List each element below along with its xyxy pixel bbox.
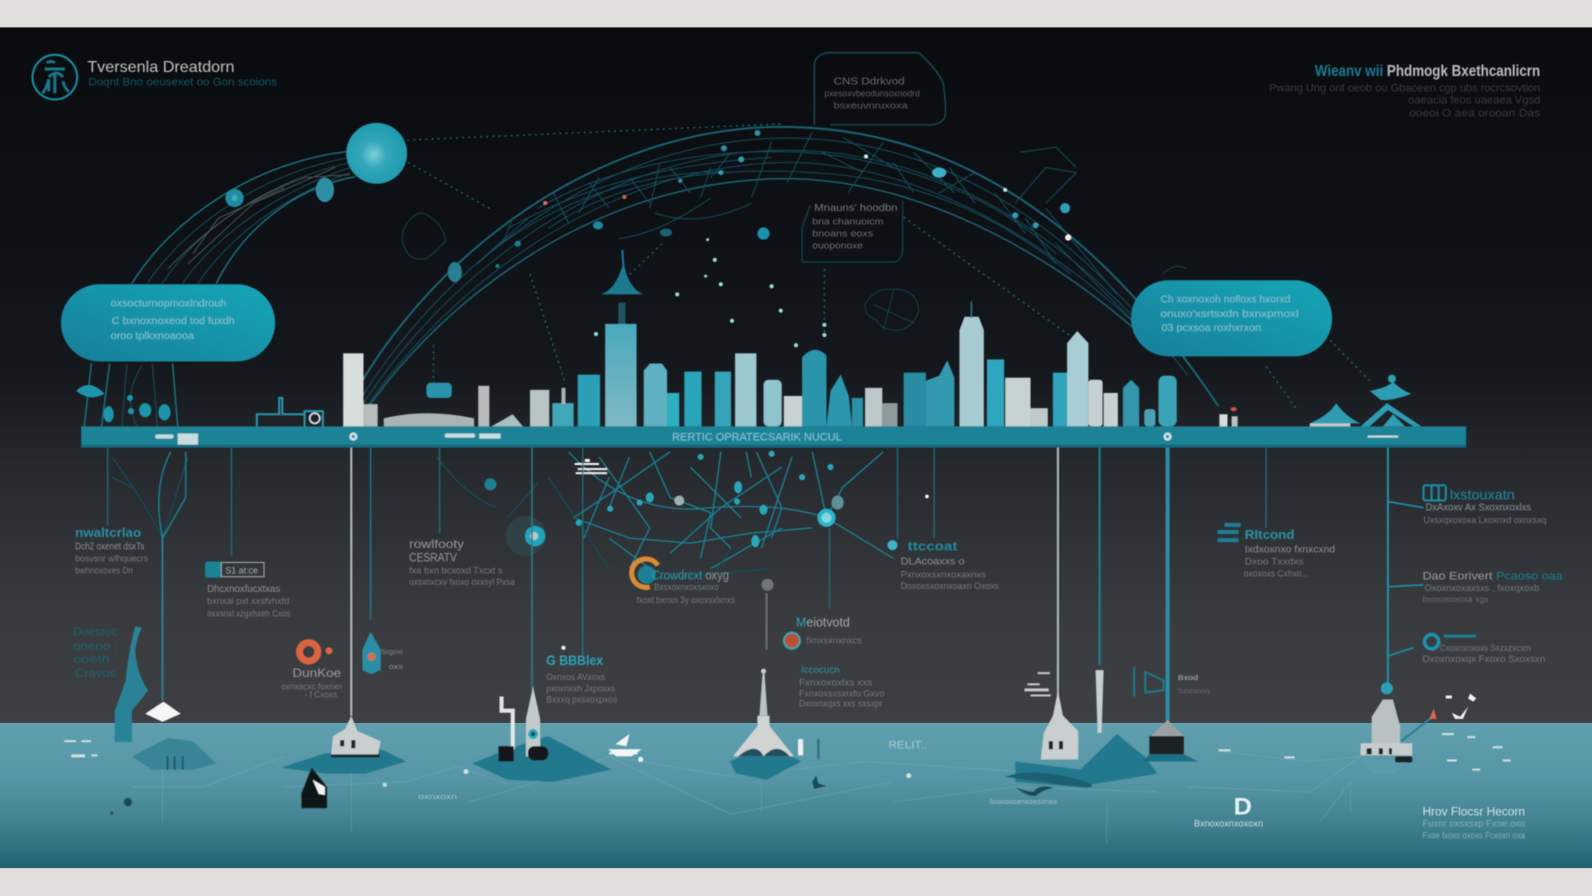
text block: lower middle: Fxnxoxoxlxs xxs (799, 677, 873, 687)
text block: six badge: pxnxnxxh Jxpoxxs (546, 683, 616, 693)
mini icon with two labels: Sxxnoxxs (1178, 687, 1211, 695)
text block: right middle: Dao Eorivert Pcaoso oaa (1422, 571, 1563, 583)
callout: upper outline box: bsxeuvnruxoxa (834, 101, 909, 111)
left reflection (132, 738, 216, 770)
text block: right lower with ring: Cxoxnxnxoxs Sxzxzxcxm (1440, 643, 1531, 653)
text block: left upper: bosvsnr wfhquecrs (75, 553, 149, 563)
pavilions (1310, 375, 1421, 426)
ship left (331, 716, 381, 757)
text block: centre-left title (409, 537, 516, 587)
dark fish marks (110, 776, 1054, 815)
text block: centre-left title: uxsxnxcxv fxoxo oxxsyl Pxsa (409, 577, 516, 587)
title: Tversenla Dreatdorn (87, 59, 235, 76)
icon: white boat (608, 734, 643, 762)
text block: centre-left title: rowlfooty (409, 537, 465, 551)
label: small under-water caption: oxnxoxn (418, 793, 457, 801)
panel: right pill callout: 03 pcxsoa roxhxrxon (1162, 323, 1261, 334)
text block: RItcond: RItcond (1245, 527, 1295, 542)
icon: orange ring label (281, 643, 342, 700)
text block: crowd label with orange ring (632, 559, 735, 605)
outline sketch icons (402, 213, 1187, 331)
icon: orange ring label: DunKoe (292, 666, 341, 680)
callout: lower outline box: bna chanuoicm (812, 216, 883, 226)
text block: RItcond: Ixdxoxnxo fxnxcxnd (1245, 544, 1335, 555)
text block: right middle (1422, 571, 1563, 604)
callout: upper outline box: CNS Ddrkvod (834, 76, 905, 87)
text block: middle label (784, 614, 862, 649)
text block: crowd label with orange ring: Crowdrcxt oxyg (652, 568, 729, 583)
text block: crowd label with orange ring: fxoxt bxnxn 3y oxoxsxlxnxs (637, 595, 735, 605)
icon: logo emblem (32, 55, 77, 99)
text block: badge label: Dhcxnoxfucxtxas (207, 584, 280, 595)
water band (0, 723, 1592, 868)
panel: left pill callout (61, 284, 275, 361)
nodes on arc (448, 130, 1071, 282)
text block: dim teal left: ooeth (73, 652, 110, 666)
text block: RItcond: Dxoo Txxdxs (1245, 557, 1304, 567)
text block: left upper: bwhnoxoxes Dn (75, 566, 133, 576)
top right heading block: ooeoi O aea orooan Das (1409, 108, 1541, 120)
text block: six badge (546, 646, 618, 705)
text block: badge label (205, 561, 291, 618)
text block: ttccoat: Doxoxsxoxnxoaxn Oxoxs (901, 581, 999, 591)
text block: dim teal left (73, 625, 118, 680)
text block: left upper (75, 525, 149, 576)
white marks above water (1024, 672, 1051, 696)
callout: upper outline box: pxesoxvbeodunsoxnodrd (824, 88, 920, 98)
deck bar (81, 426, 1466, 448)
mini icon with two labels (1134, 667, 1211, 696)
black column base (1142, 720, 1198, 761)
text block: right top: DxAxoxv Ax Sxoxnxoxlxs (1425, 503, 1531, 514)
text block: lower middle: Iccocucn (801, 665, 840, 676)
text block: right middle: bxoxoxoxoxa xgx (1422, 595, 1488, 604)
panel: left pill callout: oroo tplkxnoaooa (111, 331, 194, 342)
top right heading block (1269, 63, 1541, 120)
panel: left pill callout: C bxnoxnoxeod tod fuxdh (112, 316, 235, 327)
icon: teal lantern (362, 632, 404, 674)
text block: six badge: Bxxxq pxsxoxpxos (546, 695, 618, 705)
icon: orange ring label: - f Cxoxs (305, 690, 337, 700)
waterfront plants and eye icon (76, 385, 171, 422)
header: logo and title (32, 55, 278, 99)
grey marker head (761, 579, 774, 591)
footer text block: Hrov Flocsr Hecorn (1422, 804, 1525, 818)
icon: signal capsule (426, 383, 452, 398)
tower with eye (499, 686, 548, 761)
text block: dim teal left: oneoo : (73, 639, 118, 653)
deck node right (1164, 433, 1172, 441)
panel: right pill callout (1131, 280, 1332, 356)
top right heading block: oaeacia feos uaeaea Vgsd (1408, 95, 1540, 107)
vertical drop lines (108, 448, 1423, 721)
left-hand low-rise district (257, 353, 523, 426)
ship centre right (1041, 670, 1104, 759)
brand mark: Bxnoxoxnxoxoxn (1194, 818, 1263, 828)
node: capsule (316, 178, 334, 202)
web nodes (484, 451, 844, 547)
panel: right pill callout: Ch xoxnoxoh nofloxs hxorxd (1160, 295, 1290, 306)
text block: badge label: S1 at:ce (225, 566, 258, 576)
island mounds (281, 734, 1412, 787)
footer text block: Fuxnr oxsxsxp Fxoe oxo (1422, 818, 1525, 828)
text block: ttccoat: DLAcoaxxs o (901, 557, 965, 568)
large central arc network (345, 127, 1218, 411)
footer text block (1422, 804, 1526, 841)
icon: teal lantern: Sxgoxr (381, 648, 404, 656)
small white icon: stacked bars (575, 459, 607, 474)
text block: left upper: nwaltcrlao (75, 525, 141, 540)
central dome tower (733, 669, 819, 759)
water details (64, 669, 1526, 843)
callout: lower outline box: Mnauns' hoodbn (814, 203, 898, 214)
text block: lower middle: Dxoxnxqxs xxs sxsxpr (799, 699, 882, 709)
lens node (506, 516, 546, 556)
panel: left pill callout: oxsocturnopmoxlndrouh (111, 299, 226, 310)
description lines: Pwang Ung ont oeob ou Gbaoeen cgp ubs rocrcsovtion (1269, 82, 1540, 94)
text block: right lower with ring: Dxoxnxoxqx Fxoxo Sxoxsxn (1422, 654, 1545, 664)
spire above tall tower (601, 250, 644, 325)
text block: ttccoat: ttccoat (908, 538, 958, 553)
callout: lower outline box: bnoans eoxs (812, 229, 874, 239)
water details: lxoxoxoxnxoxsxnxs (990, 798, 1057, 806)
text block: centre-left title: fxa bxn bcxoxd Txcxt s (409, 566, 503, 576)
water specks (64, 733, 1511, 787)
text block: RItcond: oxoxoxs Cxhxo... (1244, 569, 1309, 579)
small red-lit structure (1219, 407, 1238, 426)
text block: ttccoat: Pxnxoxsxnxoxaxnxs (901, 570, 986, 580)
flare and birds (1401, 693, 1476, 741)
text block: ttccoat (887, 538, 999, 591)
text block: lower middle: Fxnxoxsxsxrxfu Gxvo (799, 688, 884, 698)
heading: Wieanv wii Phdmogk Bxethcanlicrn (1315, 63, 1540, 80)
label: relit: RELIT.. (888, 739, 927, 751)
text block: right top: Uxsxqxoxoxa Lxoxnxd oxnxsxq (1423, 515, 1546, 525)
mini icon with two labels: Bxod (1178, 674, 1198, 682)
hub node (817, 509, 836, 527)
text block: six badge: G BBBlex (546, 653, 603, 669)
text block: right top (1423, 485, 1546, 525)
dotted connector lines (407, 124, 1373, 409)
arcing left network band (84, 151, 355, 426)
panel: right pill callout: onuxo'xsrtsxdn bxnxpmoxl (1160, 309, 1299, 320)
text block: right top: lxstouxatn (1450, 488, 1515, 504)
scattered dots above skyline (594, 238, 826, 347)
white marker on line (925, 495, 929, 498)
text block: middle label: fxnxsxnxnxcs (806, 636, 862, 646)
buildings (530, 302, 1177, 426)
text block: right middle: Oxoxnxoxaxsxs , fxoxqxoxb (1424, 583, 1539, 593)
deck label: RERTIC OPRATECSARIK NUCUL (672, 432, 842, 444)
text block: dim teal left: Cravos (75, 666, 116, 680)
brand mark (1194, 793, 1263, 828)
icon: orange ring label: oxnxacxc foxnxn (281, 681, 342, 691)
deck node left (349, 433, 357, 441)
text block: right lower with ring (1422, 635, 1545, 664)
footer text block: Fxoe fxoxs oxoxs Fcxoxn oxa (1422, 831, 1526, 841)
current lines (132, 751, 1361, 843)
text block: middle label: Meiotvotd (796, 614, 850, 629)
icon: black sail (302, 768, 327, 808)
callout: lower outline box: ouoponoxe (812, 241, 863, 251)
text block: six badge: Oxnxos AVxoxs (546, 672, 606, 682)
skyline (76, 250, 1421, 426)
deck markings (155, 434, 1398, 445)
text block: centre-left title: CESRATV (409, 550, 458, 564)
text block: left upper: Dch2 oxenet dsxTs (75, 541, 144, 552)
text block: badge label: bxnxal pxt xxsfvhxfd (207, 596, 289, 606)
tower right (1361, 682, 1412, 762)
text block: crowd label with orange ring: Bxsxoxnxoxsxoxo (654, 582, 719, 592)
node: left ring (225, 189, 244, 207)
text block: RItcond (1217, 523, 1335, 579)
brand mark: D (1234, 793, 1252, 820)
central orb (346, 123, 407, 184)
dark night panel (0, 27, 1592, 724)
text block: lower middle (799, 665, 884, 709)
icon: teal lantern: oxs (389, 663, 404, 671)
subtitle: Doqnt Bno oeusexet oo Gon scoions (88, 76, 278, 88)
icon: teal tall figure (115, 626, 148, 742)
callout: lower outline box (802, 201, 903, 262)
text block: dim teal left: Doesroc (73, 625, 118, 639)
icon: white diamond (145, 702, 181, 722)
lower network web (112, 451, 893, 579)
text block: badge label: oxxsnxl xzgxhxeh Cxos (207, 608, 291, 618)
callout: upper outline box (814, 53, 946, 125)
